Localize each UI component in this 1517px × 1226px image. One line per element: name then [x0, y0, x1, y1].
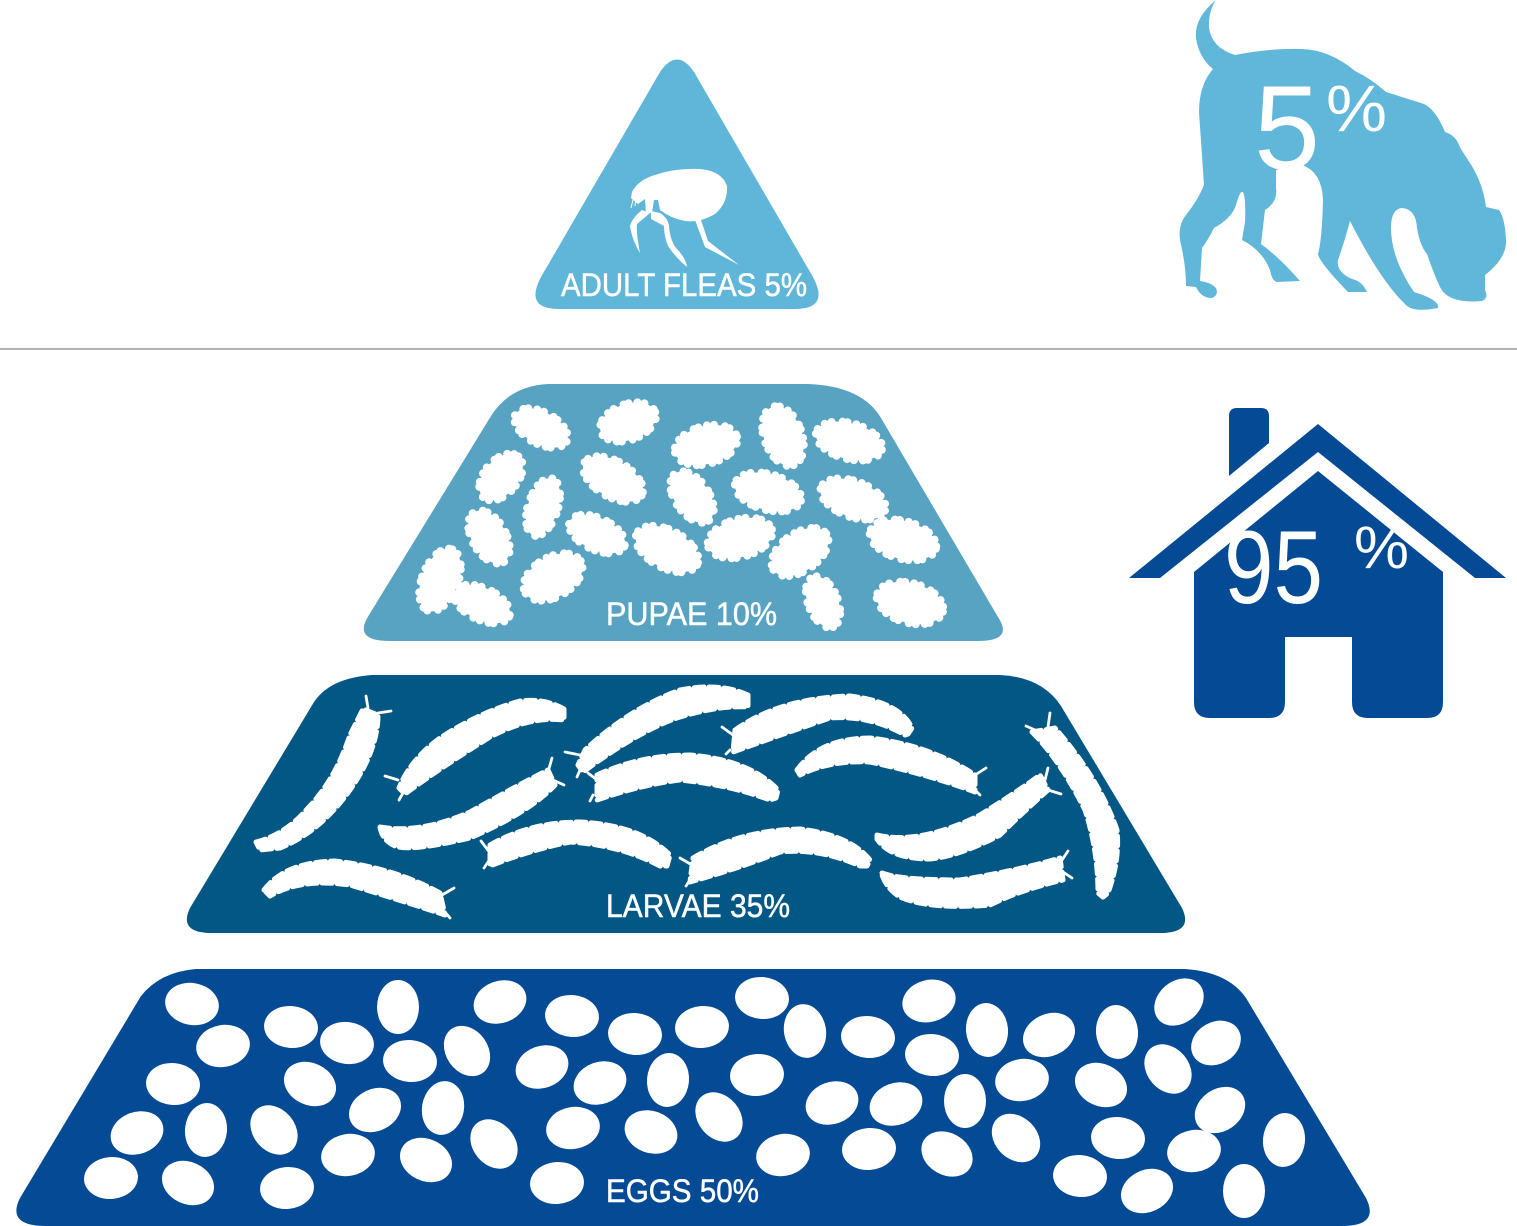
panel: adult fleas tier	[535, 60, 819, 309]
panel: larvae tier	[187, 675, 1185, 933]
panel: pupae tier	[364, 384, 1003, 641]
larvae trapezoid	[187, 675, 1185, 933]
pupae cocoons	[411, 395, 948, 633]
eggs	[82, 969, 1307, 1221]
label: pupae 10%: PUPAE 10%	[606, 596, 777, 632]
label: adult fleas 5%: ADULT FLEAS 5%	[561, 267, 807, 303]
larvae worms	[256, 687, 1118, 918]
house silhouette	[1129, 408, 1506, 718]
number: 5: 5	[1254, 61, 1320, 195]
panel: eggs tier	[16, 969, 1370, 1226]
icon: dog silhouette with 5%	[1180, 0, 1506, 310]
icon: adult flea	[630, 169, 739, 267]
symbol: percent: %	[1354, 514, 1409, 581]
symbol: percent: %	[1326, 71, 1387, 145]
eggs trapezoid	[16, 969, 1370, 1226]
number: 95: 95	[1224, 510, 1323, 626]
label: eggs 50%: EGGS 50%	[606, 1173, 759, 1209]
icon: house with 95%	[1129, 408, 1506, 718]
adult fleas triangle	[535, 60, 819, 309]
label: larvae 35%: LARVAE 35%	[606, 888, 790, 924]
dog silhouette	[1180, 0, 1506, 310]
pupae trapezoid	[364, 384, 1003, 641]
